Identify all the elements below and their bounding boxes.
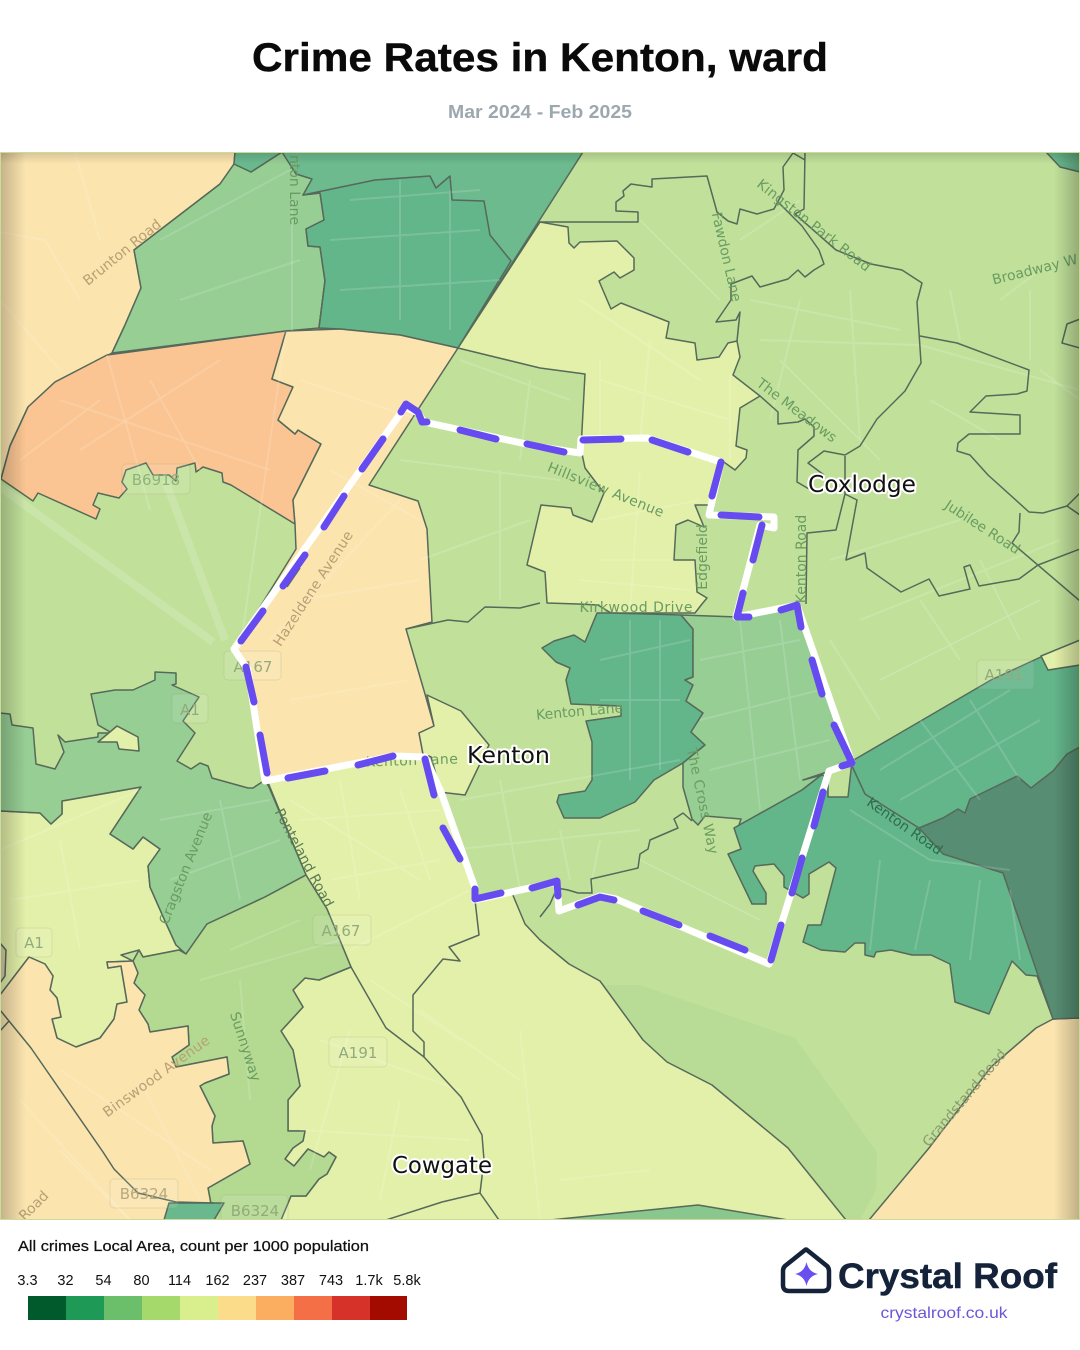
title: Crime Rates in Kenton, ward: [252, 36, 828, 80]
map labels: roads: Hillsview Avenue: [545, 460, 666, 521]
map labels: roads: Ponteland Road: [271, 806, 336, 910]
map labels: road shields: A191: [985, 666, 1023, 684]
map labels: roads: Broadway W: [991, 252, 1080, 288]
map labels: roads: Hazeldene Avenue: [270, 528, 357, 649]
map labels: roads: Grandstand Road: [920, 1047, 1010, 1150]
street network: [0, 152, 1080, 1220]
legend scale labels: [17, 1273, 421, 1289]
legend title: All crimes Local Area, count per 1000 population: [18, 1239, 369, 1255]
map labels: road shields: A1: [24, 934, 44, 952]
legend scale labels: 32: [57, 1273, 74, 1289]
place name: Coxlodge: Coxlodge: [808, 472, 916, 498]
map labels: roads: Jubilee Road: [941, 497, 1023, 558]
choropleth map: [0, 152, 1080, 1224]
map labels: roads: [16, 155, 1080, 1224]
legend scale labels: 3.3: [17, 1273, 38, 1289]
map labels: roads: Sunnyway: [226, 1010, 264, 1084]
map labels: roads: Fawdon Lane: [708, 211, 744, 303]
website url: crystalroof.co.uk: [880, 1305, 1009, 1322]
map base: [0, 152, 1080, 1220]
map labels: roads: Kenton Lane: [536, 700, 624, 724]
legend scale labels: 1.7k: [355, 1273, 383, 1289]
map labels: roads: Binswood Avenue: [100, 1033, 213, 1121]
legend scale labels: 162: [205, 1273, 230, 1289]
logo wordmark: Crystal Roof: [838, 1257, 1057, 1296]
map labels: roads: Kenton Road: [863, 795, 945, 859]
map labels: roads: The Cross Way: [683, 746, 721, 856]
map labels: road shields: A191: [339, 1044, 377, 1062]
map labels: road shields: B6324: [231, 1202, 279, 1220]
ward boundary: purple dashes: [241, 404, 852, 960]
ward boundary: white casing: [234, 407, 852, 964]
icon: Crystal Roof house logo: [783, 1250, 829, 1291]
map labels: road shields: A167: [234, 658, 272, 676]
map labels: roads: Road: [16, 1188, 52, 1224]
map labels: roads: Cragston Avenue: [156, 810, 216, 927]
legend scale labels: 237: [243, 1273, 267, 1289]
map labels: road shields: A167: [322, 922, 360, 940]
legend scale labels: 80: [133, 1273, 150, 1289]
place name: Cowgate: Cowgate: [392, 1153, 492, 1179]
map labels: road shields: B6918: [132, 471, 180, 489]
legend scale labels: 5.8k: [393, 1273, 421, 1289]
map labels: roads: Edgefield: [695, 524, 711, 590]
map labels: road shields: A1: [180, 701, 200, 719]
map labels: roads: Brunton Road: [80, 217, 165, 289]
legend colour bar: [28, 1296, 407, 1320]
map labels: road shields: [16, 464, 1034, 1224]
map labels: roads: Kingston Park Road: [753, 176, 874, 275]
legend scale labels: 387: [281, 1273, 305, 1289]
legend scale labels: 743: [319, 1273, 343, 1289]
map labels: roads: Kenton Lane: [366, 751, 458, 771]
map labels: roads: Kirkwood Drive: [580, 600, 692, 616]
map labels: roads: Kenton Road: [794, 515, 810, 603]
area boundaries: internal lines: [0, 152, 1080, 1220]
map labels: roads: The Meadows: [752, 375, 840, 446]
map labels: roads: nton Lane: [286, 155, 302, 225]
legend scale labels: 54: [95, 1273, 112, 1289]
subtitle: date range: Mar 2024 - Feb 2025: [448, 102, 632, 122]
map labels: road shields: B6324: [120, 1185, 168, 1203]
legend scale labels: 114: [168, 1273, 191, 1289]
place name: Kenton: Kenton: [467, 743, 550, 769]
